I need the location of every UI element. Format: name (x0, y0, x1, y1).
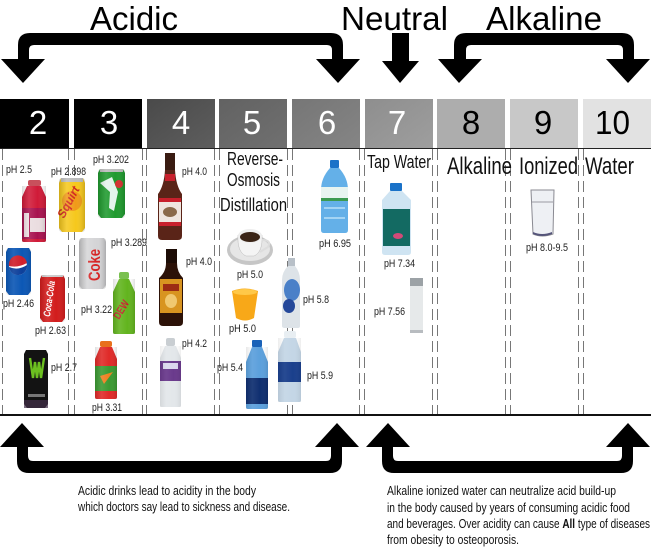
pH labels: pH 5.4 (217, 362, 243, 374)
pH labels: pH 4.0 (182, 166, 207, 178)
heading: Acidic: Acidic (90, 0, 178, 37)
icon: Kahlua bottle (159, 249, 183, 326)
pH labels: pH 2.46 (3, 298, 34, 310)
column headings (220, 149, 634, 215)
column headings: Reverse- (227, 149, 283, 169)
pH scale header: 10 (595, 104, 630, 141)
icon: Voss bottle (410, 278, 423, 333)
arrow: acidic bracket (1, 33, 360, 83)
icon: Mountain Dew bottle: DEW (111, 298, 132, 322)
column headings: Distillation (220, 195, 287, 215)
pH labels: pH 7.56 (374, 306, 405, 318)
pH scale header: 4 (172, 104, 190, 141)
text: alkaline note: from obesity to osteoporosis. (387, 533, 519, 547)
icon: water glass (531, 190, 554, 236)
icon: coffee cup (227, 229, 273, 265)
pH labels: pH 5.9 (307, 370, 333, 382)
icon: Squirt can (54, 178, 85, 232)
icon: Fiji bottle (382, 183, 411, 255)
icon: Monster can (24, 350, 48, 408)
pH labels: pH 3.31 (92, 402, 122, 414)
pH scale header: 8 (462, 104, 480, 141)
pH scale header: 5 (243, 104, 261, 141)
pH scale header: 6 (318, 104, 336, 141)
icon: orange juice glass (232, 288, 258, 320)
pH scale header (0, 99, 651, 148)
arrow: lower alkaline bracket (366, 423, 650, 473)
text: acidic note (77, 484, 290, 514)
text: acidic note: Acidic drinks lead to acidity in the body (78, 484, 257, 498)
icon: Aquafina bottle (278, 331, 301, 402)
column headings: Tap Water (367, 152, 431, 172)
pH labels: pH 8.0-9.5 (526, 242, 568, 254)
icon: Smartwater bottle (282, 258, 300, 328)
pH labels: pH 3.22 (81, 304, 112, 316)
icon: Penta water bottle (160, 338, 181, 407)
pH labels: pH 5.8 (303, 294, 329, 306)
pH labels: pH 6.95 (319, 238, 351, 250)
arrow: alkaline bracket (438, 33, 650, 83)
pH labels: pH 2.5 (6, 164, 32, 176)
column headings: Alkaline (447, 153, 512, 180)
column headings: Ionized (519, 153, 578, 180)
text: alkaline note (387, 484, 650, 547)
pH labels: pH 3.202 (93, 154, 129, 166)
icon: Dasani bottle (246, 340, 268, 409)
pH scale header: 9 (534, 104, 552, 141)
arrow: neutral (382, 33, 419, 83)
pH labels (3, 154, 568, 414)
pH labels: pH 3.289 (111, 237, 147, 249)
icon: Gatorade bottle (95, 341, 117, 399)
pH labels: pH 4.0 (186, 256, 212, 268)
icon: Diet Coke can (79, 238, 106, 289)
pH scale header: 7 (388, 104, 406, 141)
pH scale header: 2 (29, 104, 47, 141)
icon: Squirt can: Squirt (54, 183, 83, 220)
column headings: Osmosis (227, 170, 280, 190)
icon: Coca-Cola can (40, 275, 65, 322)
icon: Mountain Dew bottle (111, 272, 135, 334)
text: acidic note: which doctors say lead to sickness and disease. (77, 500, 290, 514)
arrow: lower acidic bracket (0, 423, 359, 473)
column headings: Water (585, 153, 634, 180)
icon: Coca-Cola can: Coca-Cola (42, 280, 58, 317)
icon: Budweiser bottle (158, 153, 182, 240)
pH labels: pH 2.898 (51, 166, 86, 178)
pH labels: pH 2.63 (35, 325, 66, 337)
pH scale header: 3 (100, 104, 118, 141)
pH labels: pH 2.7 (51, 362, 77, 374)
pH labels: pH 7.34 (384, 258, 415, 270)
icon: Pepsi can (6, 248, 31, 295)
icon: 7up can (98, 169, 125, 218)
pH labels: pH 5.0 (237, 269, 263, 281)
icon: Diet Coke can: Coke (85, 249, 104, 281)
pH labels: pH 4.2 (182, 338, 207, 350)
heading: Alkaline: Alkaline (486, 0, 602, 37)
icon: Volvic bottle (321, 160, 348, 233)
icon: vitamin water bottle (22, 180, 46, 242)
pH labels: pH 5.0 (229, 323, 256, 335)
heading: Neutral: Neutral (341, 0, 448, 37)
